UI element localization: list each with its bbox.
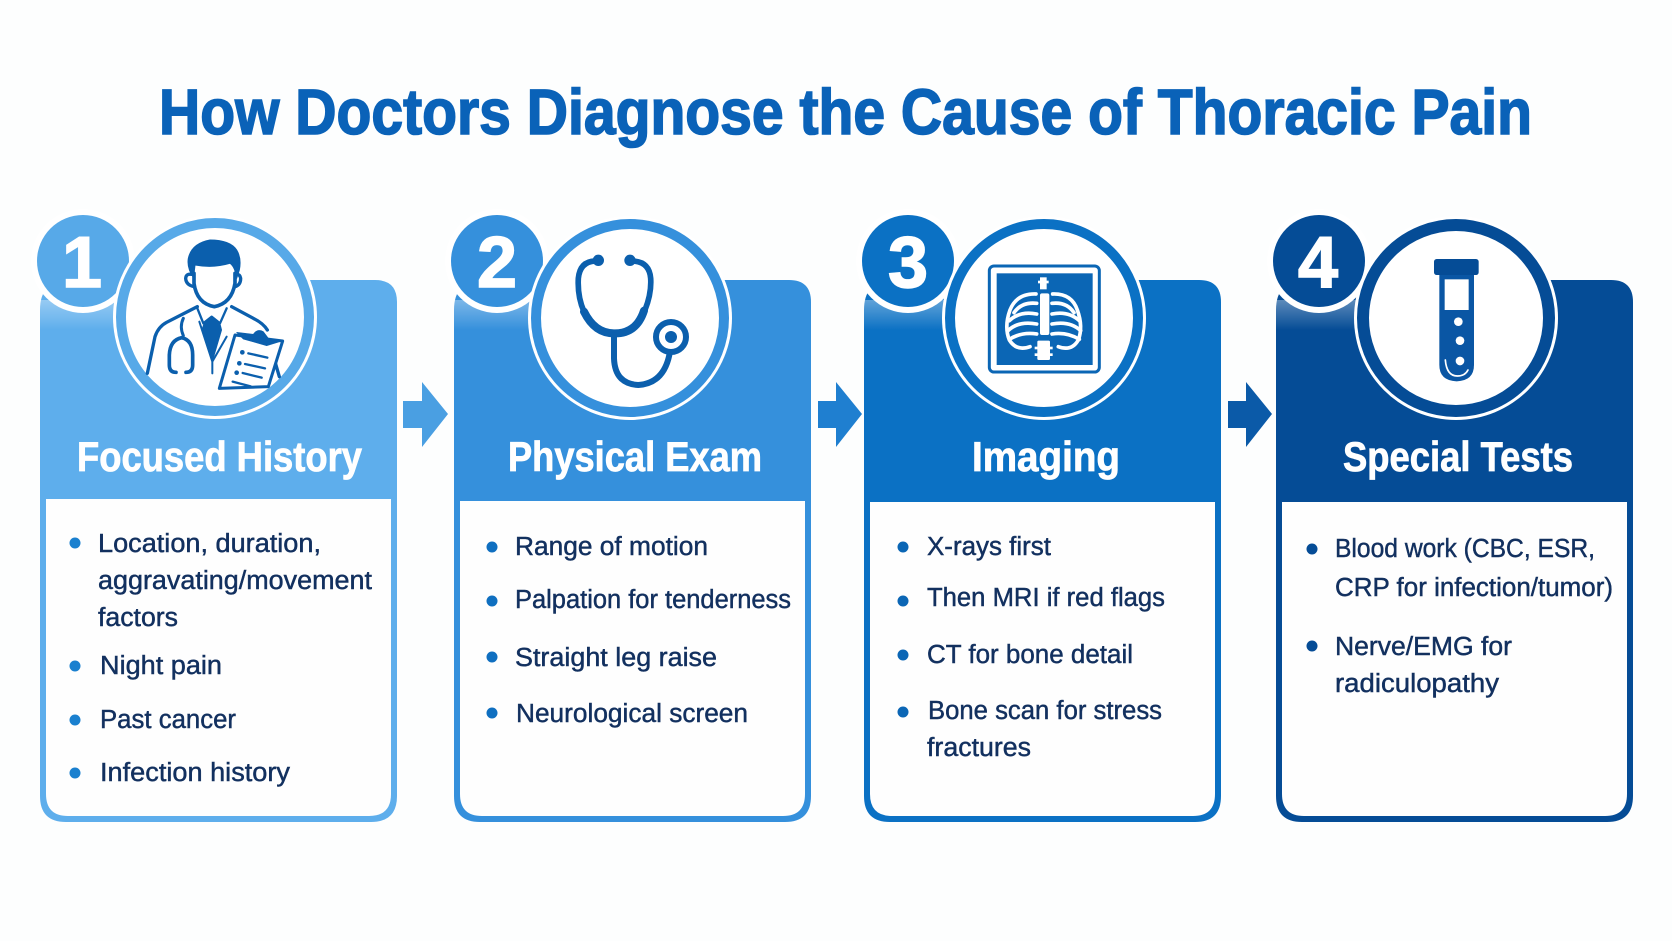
card body — [1282, 502, 1627, 816]
heading: Imaging — [972, 433, 1120, 480]
bullet list: X-rays first — [927, 533, 1051, 561]
bullet list: Location, duration, — [98, 530, 321, 558]
arrow 3 to 4 — [1228, 382, 1272, 447]
bullet list: fractures — [927, 734, 1031, 762]
arrow 1 to 2 — [403, 382, 448, 447]
bullet list: Infection history — [100, 759, 290, 787]
icon: doctor with clipboard — [113, 215, 317, 419]
number badge 3: 3 — [888, 223, 928, 303]
bullet list: Night pain — [100, 652, 222, 680]
bullet list: radiculopathy — [1335, 670, 1499, 698]
arrow 2 to 3 — [818, 382, 862, 447]
card body — [870, 502, 1215, 816]
number badge 1: 1 — [62, 223, 102, 303]
panel 4: special tests — [1267, 209, 1633, 822]
panel 1: focused history — [31, 209, 397, 822]
bullet list: Bone scan for stress — [928, 697, 1162, 725]
card background — [40, 280, 397, 822]
number badge 4 — [1267, 209, 1371, 313]
bullet list: Straight leg raise — [515, 644, 717, 672]
icon: chest x-ray — [942, 216, 1146, 420]
bullet list: factors — [98, 604, 178, 632]
bullet list — [70, 530, 372, 787]
bullet list: Neurological screen — [516, 700, 748, 728]
icon: stethoscope — [528, 216, 732, 420]
number badge 3 — [856, 209, 960, 313]
bullet list: CRP for infection/tumor) — [1335, 574, 1613, 602]
number badge 2 — [445, 209, 549, 313]
heading: Special Tests — [1343, 433, 1573, 480]
panel 3: imaging — [856, 209, 1221, 822]
bullet list: Blood work (CBC, ESR, — [1335, 535, 1595, 563]
bullet list: Palpation for tenderness — [515, 586, 791, 614]
heading: Focused History — [77, 433, 363, 480]
card body — [460, 501, 805, 816]
bullet list — [486, 533, 791, 728]
bullet list: aggravating/movement — [98, 567, 372, 595]
icon: test tube — [1354, 216, 1558, 420]
card body — [46, 499, 391, 816]
bullet list — [898, 533, 1165, 762]
bullet list: Nerve/EMG for — [1335, 633, 1513, 661]
number badge 2: 2 — [477, 223, 517, 303]
panel 2: physical exam — [445, 209, 811, 822]
bullet list: Then MRI if red flags — [927, 584, 1165, 612]
bullet list — [1306, 535, 1613, 698]
card background — [1276, 280, 1633, 822]
heading: Physical Exam — [508, 433, 762, 480]
number badge 4: 4 — [1298, 223, 1338, 303]
card background — [864, 280, 1221, 822]
card background — [454, 280, 811, 822]
number badge 1 — [31, 209, 135, 313]
title: How Doctors Diagnose the Cause of Thoracic Pain — [159, 76, 1532, 148]
bullet list: Range of motion — [515, 533, 708, 561]
bullet list: CT for bone detail — [927, 641, 1133, 669]
bullet list: Past cancer — [100, 706, 237, 734]
